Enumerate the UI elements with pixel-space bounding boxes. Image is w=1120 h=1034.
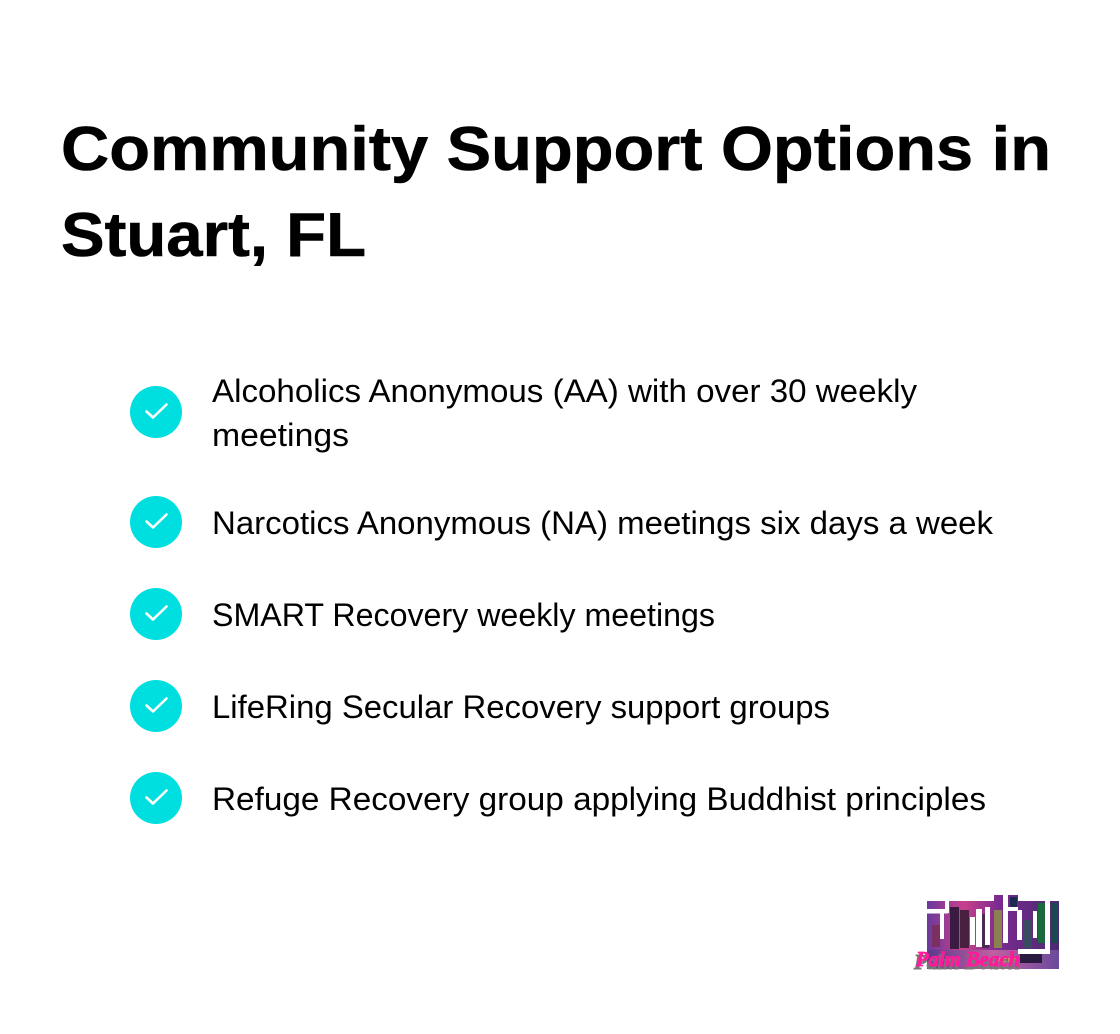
text: Refuge: Refuge Recovery group applying Buddhist principles	[212, 781, 986, 817]
icon: check circle	[130, 588, 182, 640]
icon: check circle	[130, 680, 182, 732]
title: Stuart, FL	[61, 201, 366, 270]
icon: check circle	[130, 496, 182, 548]
logo script: Palm Beach: Palm Beach	[915, 947, 1020, 971]
text: AA	[212, 373, 917, 453]
list item: SMART Recovery	[130, 588, 715, 640]
text: SMART: SMART Recovery weekly meetings	[212, 597, 715, 633]
icon: check circle	[130, 386, 182, 438]
logo: Amity Palm Beach	[913, 895, 1059, 974]
text: AA: Alcoholics Anonymous (AA) with over 30 weekly	[212, 373, 917, 409]
title	[61, 115, 1051, 270]
list item: Narcotics Anonymous	[130, 496, 994, 548]
logo script shadow: Palm Beach	[913, 950, 1020, 974]
list item: LifeRing	[130, 680, 830, 732]
list item: Refuge Recovery	[130, 772, 986, 824]
icon: check circle	[130, 772, 182, 824]
title: Community Support Options in	[61, 115, 1051, 184]
text: LifeRing: LifeRing Secular Recovery support groups	[212, 689, 830, 725]
logo white letter strokes	[927, 895, 1050, 954]
text: AA: meetings	[212, 417, 349, 453]
list item: Alcoholics Anonymous	[130, 373, 917, 453]
text: NA: Narcotics Anonymous (NA) meetings six days a week	[212, 505, 994, 541]
